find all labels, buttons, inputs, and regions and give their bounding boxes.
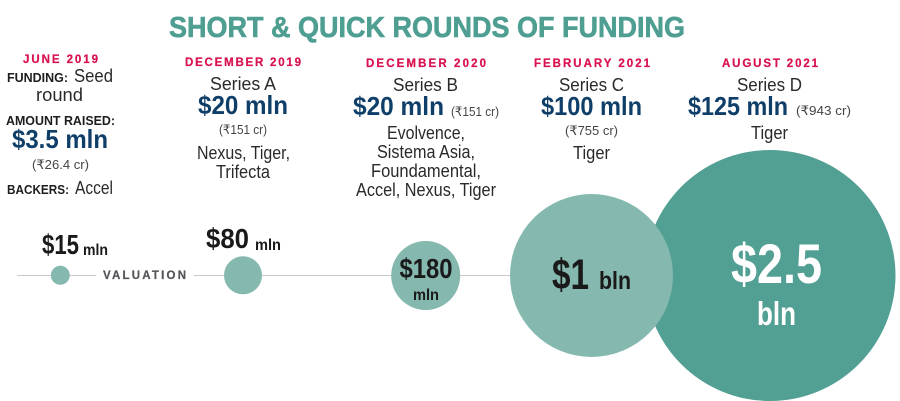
backers: BACKERS: <box>7 182 69 197</box>
bubble: $80 mln <box>206 223 281 294</box>
rupee amount: (₹151 cr) <box>451 104 499 119</box>
date: June 2019: JUNE 2019 <box>23 54 98 66</box>
panel: December 2019 series A <box>185 57 301 182</box>
backers: Accel <box>75 178 113 198</box>
backers <box>197 143 290 182</box>
rupee amount: (₹943 cr) <box>796 103 851 118</box>
backers: Nexus, Tiger, <box>197 143 290 163</box>
panel: February 2021 series C <box>534 58 651 163</box>
round: Series A: Series A <box>210 74 276 94</box>
rupee amount: (₹26.4 cr) <box>32 157 89 172</box>
round: Series D: Series D <box>737 75 802 95</box>
bubble: $1 bln: bln <box>599 267 631 295</box>
amount raised label: AMOUNT RAISED: <box>6 113 115 128</box>
funding type: Seed <box>74 66 113 86</box>
rupee amount: (₹151 cr) <box>219 122 267 137</box>
panel: June 2019 seed round <box>6 54 115 198</box>
label: valuation: VALUATION <box>103 270 186 282</box>
backers: Tiger <box>573 143 610 163</box>
funding type: round <box>36 85 83 105</box>
rupee amount: (₹755 cr) <box>565 123 618 138</box>
date: August 2021: AUGUST 2021 <box>722 58 819 70</box>
panel: August 2021 series D <box>688 58 851 143</box>
round: Series B: Series B <box>393 75 458 95</box>
backers: Trifecta <box>216 162 271 182</box>
funding type <box>7 66 113 105</box>
round: Series C: Series C <box>559 75 624 95</box>
bubble: $15 mln: mln <box>83 242 108 259</box>
bubble: $2.5 bln <box>644 150 896 401</box>
bubble: $15 mln: $15 <box>42 229 79 260</box>
backers: Sistema Asia, <box>377 142 475 162</box>
bubble: $180 mln <box>391 241 460 310</box>
bubble: $2.5 bln: $2.5 <box>731 232 822 295</box>
backers: Accel, Nexus, Tiger <box>356 180 496 200</box>
bubble: $1 bln <box>510 194 673 357</box>
amount: $100 mln: $100 mln <box>541 91 642 121</box>
date: December 2019: DECEMBER 2019 <box>185 57 301 69</box>
bubble: $180 mln: $180 <box>400 253 452 284</box>
amount: $3.5 mln: $3.5 mln <box>12 124 108 154</box>
bubble: $80 mln: $80 <box>206 223 249 254</box>
backers <box>356 123 496 200</box>
amount: $20 mln: $20 mln <box>198 90 288 120</box>
date: February 2021: FEBRUARY 2021 <box>534 58 651 70</box>
bubble: $2.5 bln: bln <box>757 295 796 332</box>
amount: $20 mln: $20 mln <box>353 91 444 121</box>
valuation timeline <box>17 150 896 401</box>
date: December 2020: DECEMBER 2020 <box>366 58 486 70</box>
bubble: $80 mln: mln <box>255 237 281 254</box>
backers: Evolvence, <box>387 123 465 143</box>
title: SHORT & QUICK ROUNDS OF FUNDING <box>169 12 685 44</box>
bubble: $15 mln <box>42 229 108 285</box>
backers: Foundamental, <box>371 161 481 181</box>
bubble: $180 mln: mln <box>413 287 439 304</box>
panel: December 2020 series B <box>353 58 499 200</box>
backers: Tiger <box>751 123 788 143</box>
backers <box>7 178 113 198</box>
funding type: FUNDING: <box>7 70 68 85</box>
amount: $125 mln: $125 mln <box>688 91 788 121</box>
bubble: $1 bln: $1 <box>552 251 589 299</box>
